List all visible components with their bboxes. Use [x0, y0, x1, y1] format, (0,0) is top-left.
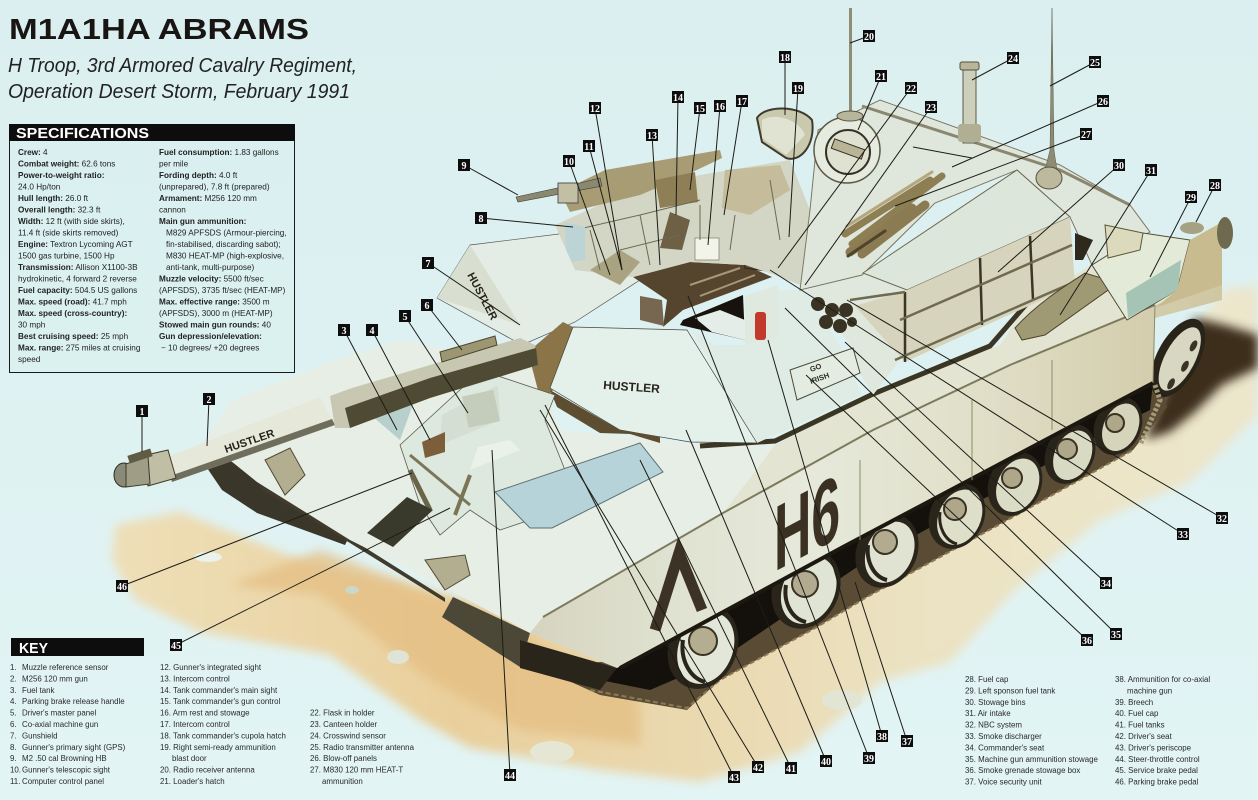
specifications left column: Hull length: 26.0 ft	[18, 194, 89, 203]
callout 14: 14	[673, 93, 683, 104]
turret name HUSTLER: HUSTLER	[603, 378, 661, 396]
callout 40	[686, 430, 832, 768]
key column 4: 32. NBC system	[965, 721, 1022, 730]
specifications left column: hydrokinetic, 4 forward 2 reverse	[18, 274, 137, 284]
key column 1: 7.	[10, 731, 17, 740]
key column 1	[10, 663, 126, 786]
specifications heading: SPECIFICATIONS	[16, 126, 149, 142]
key column 1: Fuel tank	[22, 686, 55, 695]
go irish plate	[790, 348, 860, 400]
specifications right column: (unprepared), 7.8 ft (prepared)	[159, 182, 270, 192]
callout 31	[1060, 164, 1157, 315]
key column 2: 21. Loader's hatch	[160, 777, 225, 786]
callout 25: 25	[1090, 58, 1100, 69]
callout 38	[768, 340, 888, 743]
key column 5: 42. Driver's seat	[1115, 732, 1173, 741]
key column 4: 37. Voice security unit	[965, 778, 1043, 787]
callout 46	[116, 473, 412, 593]
callout 25	[1050, 56, 1101, 86]
callout 7	[422, 257, 520, 325]
callout 8: 8	[478, 214, 484, 225]
specifications left column: 11.4 ft (side skirts removed)	[18, 228, 119, 238]
key column 1: Driver's master panel	[22, 709, 97, 718]
main gun	[114, 336, 538, 487]
key column 1: 11.	[10, 777, 20, 786]
key column 1: Gunshield	[22, 731, 58, 740]
specifications right column: Fuel consumption: 1.83 gallons	[159, 148, 279, 157]
key column 3: 26. Blow-off panels	[310, 754, 377, 763]
callout 2	[203, 393, 215, 446]
key column 1: 1.	[10, 663, 17, 672]
callout 12: 12	[590, 104, 600, 115]
callout 11	[583, 140, 622, 270]
key column 2: blast door	[172, 754, 207, 763]
key column 2: 20. Radio receiver antenna	[160, 766, 255, 775]
key column 1: 3.	[10, 686, 17, 695]
callout 14	[672, 91, 684, 215]
key column 1: 4.	[10, 697, 17, 706]
interior: breech block and ammunition door	[633, 235, 778, 345]
cheek name HUSTLER: HUSTLER	[464, 271, 499, 322]
ground shadow on deck	[367, 497, 433, 547]
hull side skirt	[530, 282, 1222, 668]
specifications right column: (APFSDS), 3000 m (HEAT-MP)	[159, 309, 273, 318]
key column 5	[1115, 675, 1210, 787]
key column 1: M2 .50 cal Browning HB	[22, 754, 107, 763]
turret interior crew stations	[555, 150, 810, 285]
callout 5: 5	[402, 312, 408, 323]
callout 1: 1	[140, 407, 144, 418]
callout 17: 17	[737, 97, 747, 108]
loader's hatch door	[757, 108, 813, 159]
callout 35: 35	[1111, 630, 1121, 641]
key column 1: 8.	[10, 743, 17, 752]
gun shield strip	[528, 322, 575, 398]
front hull deck	[205, 340, 775, 633]
callout 26	[913, 95, 1109, 167]
callout 3: 3	[342, 326, 346, 337]
specifications right column: M830 HEAT-MP (high-explosive,	[166, 252, 284, 260]
key column 1: Gunner's telescopic sight	[22, 766, 111, 775]
specifications right column: Fording depth: 4.0 ft	[159, 171, 238, 180]
key column 5: 43. Driver's periscope	[1115, 743, 1192, 752]
key heading: KEY	[19, 640, 48, 657]
callout 29	[1150, 191, 1197, 277]
callout 28: 28	[1210, 181, 1220, 192]
callout 15: 15	[695, 104, 705, 115]
callout 20: 20	[864, 32, 874, 43]
key column 1: Parking brake release handle	[22, 697, 125, 706]
ground shadow behind rear of tank	[1145, 318, 1258, 440]
key column 3: 23. Canteen holder	[310, 720, 377, 729]
callout 41: 41	[786, 764, 796, 775]
key column 1: Computer control panel	[22, 777, 104, 786]
callout 4: 4	[370, 326, 374, 337]
tracks	[540, 370, 1167, 710]
key column 2: 12. Gunner's integrated sight	[160, 663, 262, 672]
callout 40: 40	[821, 757, 831, 768]
key column 1: M256 120 mm gun	[22, 674, 88, 683]
callout 46: 46	[117, 582, 127, 593]
callout 33: 33	[1178, 530, 1188, 541]
callout 33	[770, 270, 1189, 541]
key column 3: 27. M830 120 mm HEAT-T	[310, 766, 403, 775]
key column 2: 13. Intercom control	[160, 674, 230, 683]
callout 15	[690, 102, 706, 190]
air intake grille	[1015, 273, 1118, 340]
specifications right column: Armament: M256 120 mm	[159, 194, 257, 203]
callout 19: 19	[793, 84, 803, 95]
specifications left column: 1500 gas turbine, 1500 Hp	[18, 252, 115, 260]
turret right cheek	[550, 327, 757, 443]
specifications left column: speed	[18, 355, 41, 364]
key column 1: 10.	[10, 766, 21, 775]
subtitle: H Troop, 3rd Armored Cavalry Regiment,	[8, 54, 357, 77]
turret deck rail	[862, 106, 1130, 205]
key column 2: 18. Tank commander's cupola hatch	[160, 731, 286, 740]
engine deck top	[863, 170, 1070, 290]
main gun ammunition rack	[845, 172, 942, 256]
key column 4	[965, 675, 1099, 787]
road wheels	[655, 310, 1217, 700]
callout 13	[646, 129, 660, 265]
callout 41	[640, 460, 797, 775]
key column 1: Co-axial machine gun	[22, 720, 98, 729]
specifications left column: Power-to-weight ratio:	[18, 171, 104, 180]
key column 2: 14. Tank commander's main sight	[160, 686, 278, 695]
skirt rail and groove lines	[543, 300, 1155, 668]
key column 3	[310, 709, 415, 786]
key column 4: 35. Machine gun ammunition stowage	[965, 755, 1099, 764]
callout 16: 16	[715, 102, 725, 113]
callout 10	[563, 155, 610, 275]
callout 6	[421, 299, 462, 350]
specifications right column: Muzzle velocity: 5500 ft/sec	[159, 274, 264, 284]
turret left cheek	[437, 232, 640, 345]
callout 21	[858, 70, 887, 130]
key column 2: 16. Arm rest and stowage	[160, 709, 250, 718]
gunner's primary sight	[565, 222, 585, 262]
specifications left column: Max. speed (cross-country):	[18, 309, 127, 318]
rear plate and exhaust	[1155, 217, 1233, 308]
radio receiver antenna	[837, 8, 863, 121]
callout 28	[1196, 179, 1221, 222]
callout 37	[855, 582, 913, 748]
callout 34	[845, 342, 1112, 590]
callout 11: 11	[584, 142, 594, 153]
callout 18: 18	[780, 53, 790, 64]
callout 24	[972, 52, 1019, 80]
callout 36	[806, 375, 1093, 647]
callout 43: 43	[729, 773, 739, 784]
specifications right column: Stowed main gun rounds: 40	[159, 320, 271, 330]
callout 4	[366, 324, 430, 440]
callout 5	[399, 310, 468, 413]
specifications left column	[18, 148, 141, 364]
key column 5: 40. Fuel cap	[1115, 709, 1159, 718]
specifications left column: Max. speed (road): 41.7 mph	[18, 298, 127, 306]
title: M1A1HA ABRAMS	[9, 14, 309, 46]
key column 3: ammunition	[322, 777, 363, 786]
turret lower shadow wedge	[550, 390, 660, 443]
key column 1: Muzzle reference sensor	[22, 663, 109, 672]
callout 18	[779, 51, 791, 115]
key column 3: 22. Flask in holder	[310, 709, 375, 718]
callout 42	[540, 410, 764, 774]
specifications left column: Best cruising speed: 25 mph	[18, 332, 129, 341]
callout 31: 31	[1146, 166, 1156, 177]
callout 43	[545, 405, 740, 784]
key column 2: 19. Right semi-ready ammunition	[160, 743, 276, 752]
key column 5: 41. Fuel tanks	[1115, 721, 1165, 730]
callout 19	[789, 82, 804, 237]
specifications right column: Max. effective range: 3500 m	[159, 298, 270, 306]
crosswind sensor	[958, 62, 981, 143]
bustle side	[805, 273, 907, 395]
stowage bins	[850, 217, 1093, 362]
barrel name HUSTLER: HUSTLER	[223, 428, 276, 456]
key column 3: 25. Radio transmitter antenna	[310, 743, 415, 752]
callout 37: 37	[902, 737, 912, 748]
callout 16	[708, 100, 726, 245]
callout 42: 42	[753, 763, 763, 774]
rear turret deck	[800, 100, 1150, 290]
lower front hull shadow	[203, 445, 617, 690]
fuel tank panel	[365, 385, 420, 440]
specifications left column: Combat weight: 62.6 tons	[18, 160, 115, 168]
callout 32	[847, 300, 1228, 525]
key column 2: 17. Intercom control	[160, 720, 230, 729]
callout 32: 32	[1217, 514, 1227, 525]
callout 22: 22	[906, 84, 916, 95]
key column 5: 38. Ammunition for co-axial	[1115, 675, 1210, 684]
callout 10: 10	[564, 157, 574, 168]
callout 36: 36	[1082, 636, 1092, 647]
key column 4: 28. Fuel cap	[965, 675, 1009, 684]
callout 3	[338, 324, 397, 430]
go irish plate: IRISH	[809, 371, 830, 386]
callout 22	[778, 82, 917, 268]
callout 27	[895, 128, 1092, 206]
marking chevron	[655, 553, 702, 630]
key column 4: 36. Smoke grenade stowage box	[965, 766, 1080, 775]
specifications left column: Crew: 4	[18, 148, 48, 157]
key column 2: 15. Tank commander's gun control	[160, 697, 280, 706]
go irish plate: GO	[809, 361, 823, 374]
key column 4: 30. Stowage bins	[965, 698, 1026, 707]
callout 24: 24	[1008, 54, 1018, 65]
specifications right column: cannon	[159, 206, 186, 214]
specifications left column: 24.0 Hp/ton	[18, 182, 61, 192]
specifications left column: Width: 12 ft (with side skirts),	[18, 217, 125, 226]
key column 1: 2.	[10, 674, 17, 683]
callout 44	[492, 450, 516, 782]
callout 23	[805, 101, 937, 285]
panel: specifications	[9, 124, 295, 372]
towing fixtures	[265, 448, 470, 590]
callout 13: 13	[647, 131, 657, 142]
key column 4: 31. Air intake	[965, 709, 1011, 718]
specifications left column: Engine: Textron Lycoming AGT	[18, 240, 133, 249]
M2 .50 cal machine gun	[516, 178, 602, 203]
subtitle: Operation Desert Storm, February 1991	[8, 80, 350, 103]
callout 1	[136, 405, 148, 452]
specifications right column: Gun depression/elevation:	[159, 332, 262, 341]
specifications right column: (APFSDS), 3735 ft/sec (HEAT-MP)	[159, 286, 286, 295]
callout 44: 44	[505, 771, 515, 782]
driver's compartment	[400, 370, 565, 535]
specifications left column: Max. range: 275 miles at cruising	[18, 344, 141, 352]
key column 1: 6.	[10, 720, 17, 729]
callout 23: 23	[926, 103, 936, 114]
key column 1: 5.	[10, 709, 17, 718]
callout 30	[998, 159, 1125, 272]
callout 29: 29	[1186, 193, 1196, 204]
callout 39: 39	[864, 754, 874, 765]
key column 4: 34. Commander's seat	[965, 743, 1045, 752]
left sponson fuel tank	[1092, 225, 1190, 320]
specifications right column: Main gun ammunition:	[159, 217, 246, 226]
key column 5: machine gun	[1127, 686, 1172, 695]
driver's hatch panel	[495, 443, 663, 528]
specifications left column: Overall length: 32.3 ft	[18, 206, 101, 214]
specifications left column: 30 mph	[18, 320, 46, 330]
subtitle	[8, 54, 357, 103]
callout 8	[475, 212, 573, 227]
callout 7: 7	[426, 259, 430, 270]
key column 5: 45. Service brake pedal	[1115, 766, 1198, 775]
callout 12	[589, 102, 622, 270]
callout 45	[170, 508, 450, 652]
desert ground	[112, 285, 1258, 782]
side markings H6: H6	[774, 454, 840, 592]
specifications right column	[159, 148, 287, 352]
callout 39	[688, 296, 875, 765]
callout 20	[850, 30, 875, 43]
key column 4: 33. Smoke discharger	[965, 732, 1042, 741]
specifications right column: fin-stabilised, discarding sabot);	[166, 240, 281, 249]
callout 45: 45	[171, 641, 181, 652]
key column 3: 24. Crosswind sensor	[310, 731, 386, 740]
radio transmitter antenna	[1036, 8, 1062, 189]
key column 5: 44. Steer-throttle control	[1115, 755, 1200, 764]
callout 2: 2	[206, 395, 212, 406]
callout 38: 38	[877, 732, 887, 743]
callout 26: 26	[1098, 97, 1108, 108]
smoke grenade discharger	[811, 297, 857, 333]
hull ledge above skirt	[723, 265, 1222, 513]
specifications left column: Transmission: Allison X1100-3B	[18, 263, 138, 272]
specifications right column: per mile	[159, 160, 189, 168]
callout 34: 34	[1101, 579, 1111, 590]
turret rear section	[690, 290, 862, 443]
callout 6: 6	[424, 301, 430, 312]
callout 30: 30	[1114, 161, 1124, 172]
key column 4: 29. Left sponson fuel tank	[965, 686, 1055, 695]
key column 2	[160, 663, 286, 786]
key column 5: 46. Parking brake pedal	[1115, 778, 1199, 787]
callout 27: 27	[1081, 130, 1091, 141]
specifications right column: M829 APFSDS (Armour-piercing,	[166, 228, 287, 238]
specifications left column: Fuel capacity: 504.5 US gallons	[18, 286, 137, 295]
specifications right column: anti-tank, multi-purpose)	[166, 263, 255, 272]
key column 1: Gunner's primary sight (GPS)	[22, 743, 126, 752]
callout 21: 21	[876, 72, 886, 83]
callout 35	[785, 308, 1122, 641]
panel: key	[10, 638, 1210, 787]
tank commander's cupola hatch	[814, 117, 880, 183]
key column 5: 39. Breech	[1115, 698, 1153, 707]
callout 9	[458, 159, 518, 195]
key column 1: 9.	[10, 754, 17, 763]
specifications right column: − 10 degrees/ +20 degrees	[161, 344, 259, 352]
callout 9: 9	[462, 161, 466, 172]
callout 17	[724, 95, 748, 215]
